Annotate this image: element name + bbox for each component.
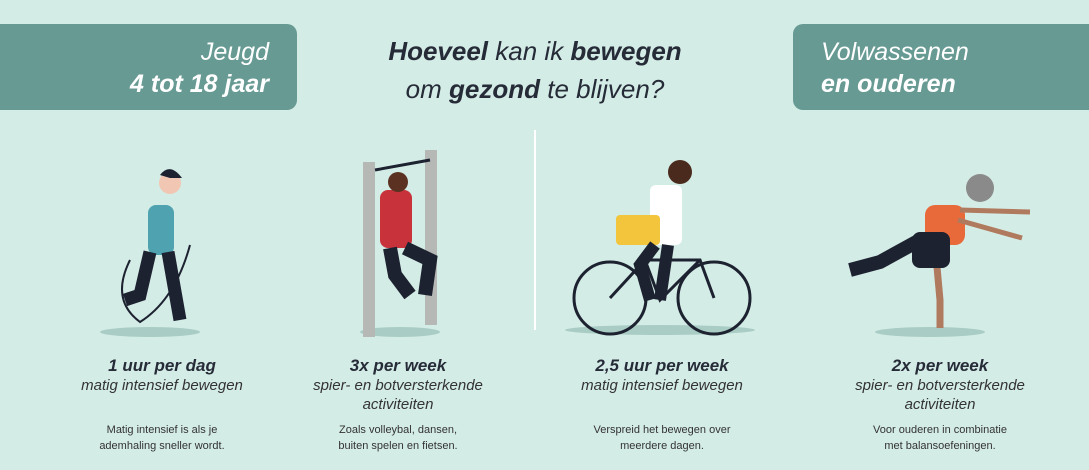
col 3 bbox=[581, 356, 743, 452]
divider bbox=[534, 130, 536, 330]
text: Verspreid het bewegen over bbox=[594, 424, 730, 436]
text: met balansoefeningen. bbox=[884, 440, 996, 452]
text: Zoals volleybal, dansen, bbox=[339, 424, 457, 436]
panel: jeugd: Jeugd bbox=[201, 38, 269, 66]
text: meerdere dagen. bbox=[620, 440, 704, 452]
text: Matig intensief is als je bbox=[107, 424, 217, 436]
panel: volwassenen: en ouderen bbox=[821, 70, 956, 98]
col 1 bbox=[81, 356, 243, 452]
col 3: matig intensief bewegen bbox=[581, 377, 743, 394]
col 2: 3x per week bbox=[350, 356, 446, 375]
title: Hoeveel kan ik bewegen bbox=[388, 36, 682, 66]
col 2 bbox=[313, 356, 483, 452]
panel: volwassenen: Volwassenen bbox=[821, 38, 969, 66]
figure: pull up bbox=[360, 150, 440, 337]
panel: volwassenen bbox=[793, 24, 1089, 110]
text: Voor ouderen in combinatie bbox=[873, 424, 1007, 436]
col 4: activiteiten bbox=[905, 396, 975, 413]
col 2: activiteiten bbox=[363, 396, 433, 413]
col 4: spier- en botversterkende bbox=[855, 377, 1025, 394]
text: buiten spelen en fietsen. bbox=[338, 440, 458, 452]
figure: cyclist bbox=[565, 160, 755, 335]
col 4 bbox=[855, 356, 1025, 452]
panel: jeugd bbox=[0, 24, 297, 110]
figure: balance bbox=[850, 174, 1030, 337]
title: om gezond te blijven? bbox=[406, 74, 664, 104]
title bbox=[388, 36, 682, 104]
col 2: spier- en botversterkende bbox=[313, 377, 483, 394]
col 1: 1 uur per dag bbox=[108, 356, 216, 375]
col 1: matig intensief bewegen bbox=[81, 377, 243, 394]
text: ademhaling sneller wordt. bbox=[99, 440, 225, 452]
col 4: 2x per week bbox=[892, 356, 988, 375]
panel: jeugd: 4 tot 18 jaar bbox=[130, 70, 269, 98]
figure: jump rope bbox=[100, 169, 200, 337]
col 3: 2,5 uur per week bbox=[595, 356, 729, 375]
